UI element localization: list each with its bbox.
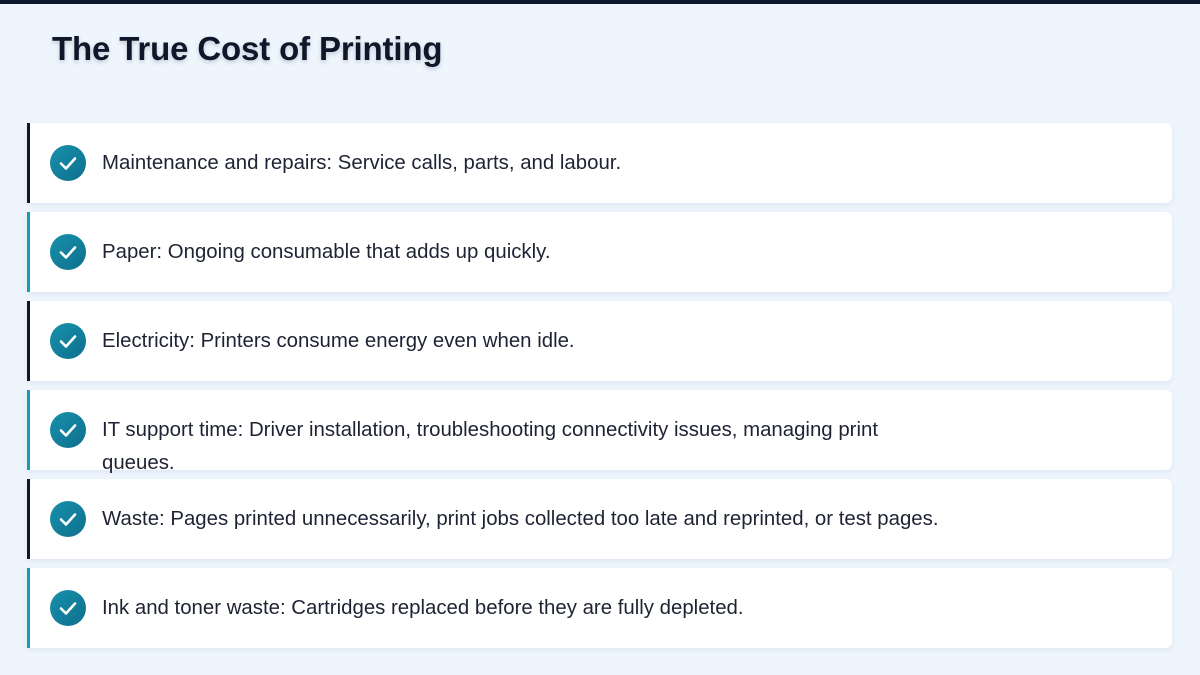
card: ink and toner	[27, 568, 1172, 648]
icon: check	[50, 145, 86, 181]
text: Waste: Pages printed unnecessarily, print jobs collected too late and reprinted, or test pages.	[102, 508, 938, 530]
title: The True Cost of Printing	[52, 30, 442, 67]
icon: check	[50, 590, 86, 626]
card: IT support	[27, 390, 1172, 470]
card: paper	[27, 212, 1172, 292]
card: electricity	[27, 301, 1172, 381]
text: Electricity: Printers consume energy even when idle.	[102, 330, 575, 352]
text: IT support time: Driver installation, troubleshooting connectivity issues, managing print queues.	[102, 419, 878, 474]
icon: check	[50, 501, 86, 537]
icon: check	[50, 323, 86, 359]
icon: check	[50, 234, 86, 270]
card: waste	[27, 479, 1172, 559]
text: Maintenance and repairs: Service calls, parts, and labour.	[102, 152, 621, 174]
text: Ink and toner waste: Cartridges replaced before they are fully depleted.	[102, 597, 744, 619]
card: maintenance	[27, 123, 1172, 203]
text: Paper: Ongoing consumable that adds up quickly.	[102, 241, 550, 263]
icon: check	[50, 412, 86, 448]
